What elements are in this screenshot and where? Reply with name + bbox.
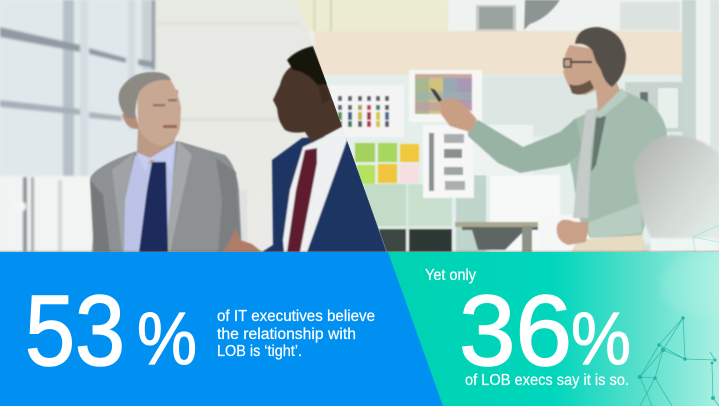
- stat: 36 percent: %: [571, 297, 631, 380]
- text: yet only: Yet only: [425, 267, 476, 284]
- text: IT executives description: of IT executives believe: [217, 308, 375, 325]
- man 1 grey suit: [90, 72, 262, 252]
- stat: 53 percent: [25, 275, 197, 387]
- separator strip: [0, 250, 719, 252]
- stat: 53 percent: %: [137, 297, 197, 380]
- stat: 36 percent: [459, 275, 631, 387]
- stat: 36 percent: 36: [459, 275, 572, 387]
- window frame: [0, 0, 300, 252]
- text: IT executives description: the relationship with: [217, 326, 356, 343]
- man 2 navy suit: [262, 46, 387, 252]
- network graphic: [638, 255, 719, 406]
- network lines on photo: [693, 225, 719, 252]
- teal stat panel: [388, 252, 719, 406]
- foreground blurred head: [633, 135, 719, 252]
- text: IT executives description: LOB is ‘tight’.: [217, 343, 302, 360]
- photo: two executives talking: [0, 0, 395, 252]
- wall charts and sticky notes: [330, 70, 533, 198]
- stat: 53 percent: 53: [25, 275, 125, 387]
- photo: presenter at glass wall: [297, 0, 719, 253]
- blue stat panel: [0, 252, 444, 406]
- text: LOB execs description: of LOB execs say it is so.: [465, 372, 629, 389]
- presenter in sage shirt: [430, 27, 667, 252]
- text: IT executives description: [217, 308, 375, 360]
